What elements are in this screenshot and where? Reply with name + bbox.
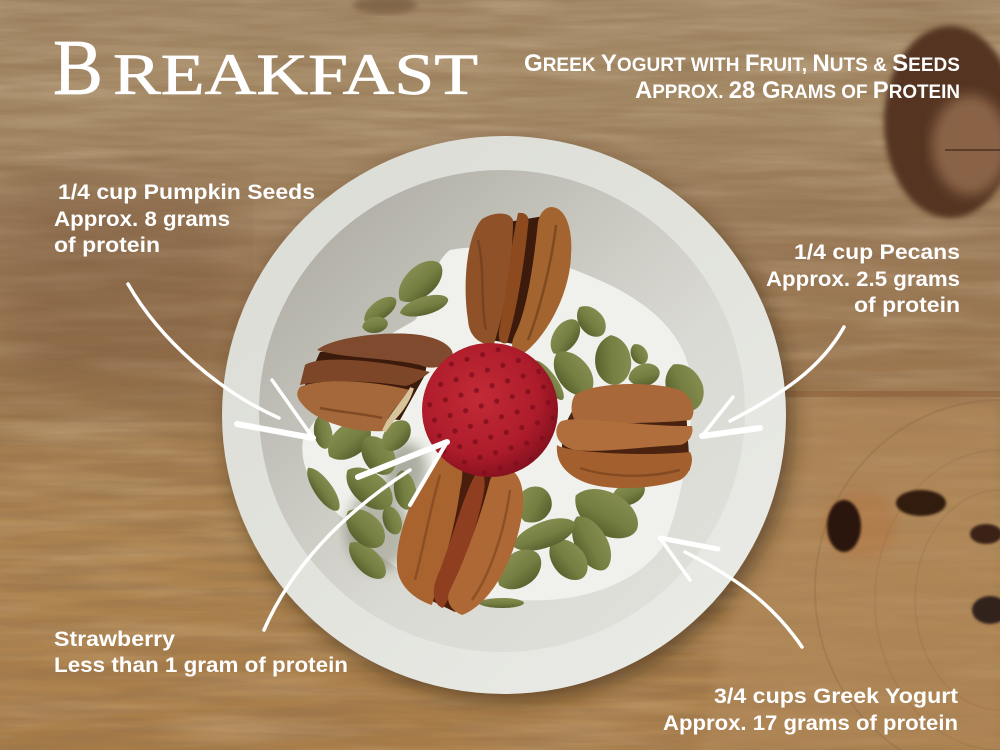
label: strawberry: Strawberry — [54, 627, 175, 651]
pumpkin seeds — [301, 253, 711, 608]
subtitle — [524, 50, 960, 104]
pecan: bottom — [397, 451, 523, 615]
label: pumpkin seeds — [54, 180, 315, 257]
title — [53, 25, 478, 112]
title: B — [53, 25, 103, 112]
label: pumpkin seeds: 1/4 cup Pumpkin Seeds — [58, 180, 315, 204]
title: REAKFAST — [113, 42, 478, 107]
subtitle: GREEK YOGURT WITH FRUIT, NUTS & SEEDS — [524, 50, 960, 77]
arrow: pecans — [702, 327, 844, 436]
arrow: strawberry — [264, 442, 447, 630]
bowl — [222, 136, 793, 702]
label: greek yogurt — [663, 684, 958, 735]
yogurt — [302, 248, 692, 600]
subtitle: APPROX. 28 GRAMS OF PROTEIN — [635, 77, 960, 104]
label: greek yogurt: Approx. 17 grams of protein — [663, 711, 958, 735]
label: strawberry: Less than 1 gram of protein — [54, 653, 348, 677]
label: pecans: of protein — [854, 293, 960, 317]
label: pecans: Approx. 2.5 grams — [766, 267, 960, 291]
label: pumpkin seeds: Approx. 8 grams — [54, 207, 230, 231]
pecan: top — [466, 207, 571, 356]
strawberry — [422, 343, 558, 477]
label: pecans — [766, 240, 960, 317]
pecan: left — [297, 334, 453, 431]
label: pumpkin seeds: of protein — [54, 233, 160, 257]
arrow: pumpkin seeds — [128, 284, 313, 438]
arrow: greek yogurt — [660, 538, 802, 647]
label: pecans: 1/4 cup Pecans — [794, 240, 960, 264]
label: strawberry — [54, 627, 348, 677]
label: greek yogurt: 3/4 cups Greek Yogurt — [714, 684, 958, 708]
pecan: right — [556, 384, 693, 488]
